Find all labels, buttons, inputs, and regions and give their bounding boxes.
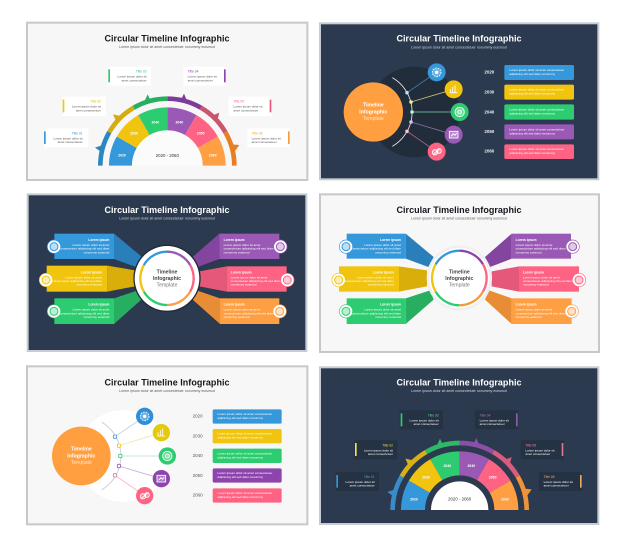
bar: 2030 bbox=[504, 85, 574, 100]
subtitle: Lorem ipsum dolor sit amet consectetuer nonummy euismod bbox=[119, 45, 215, 49]
bar: 2020 bbox=[504, 65, 574, 80]
spoke: pink: Lorem ipsum bbox=[523, 270, 544, 274]
spoke: purple bbox=[193, 234, 287, 267]
callout: title 01 bbox=[44, 128, 88, 147]
outer ring with markers bbox=[95, 94, 239, 166]
years column: 2060 bbox=[193, 493, 203, 498]
subtitle: Lorem ipsum dolor sit amet consectetuer nonummy euismod bbox=[411, 45, 507, 49]
bar: 2060: adipiscing elit sed diam nonummy bbox=[217, 495, 264, 499]
radial diagram bbox=[77, 410, 169, 502]
bar: 2050 bbox=[504, 124, 574, 139]
spoke: purple bbox=[485, 234, 579, 267]
spoke: yellow bbox=[39, 266, 135, 292]
semicircle chart: 2020 - 2060 bbox=[156, 153, 179, 158]
spoke: blue: nonummy euismod bbox=[375, 250, 401, 254]
subtitle: Lorem ipsum dolor sit amet consectetuer nonummy euismod bbox=[411, 217, 507, 221]
spoke: green: Lorem ipsum dolor sit amet bbox=[73, 308, 109, 312]
spoke: pink: nonummy euismod bbox=[231, 283, 257, 287]
bar: 2020: adipiscing elit sed diam nonummy bbox=[217, 416, 264, 420]
bar: 2030: adipiscing elit sed diam nonummy bbox=[509, 92, 556, 96]
central hub bbox=[133, 245, 201, 312]
years column bbox=[193, 414, 203, 498]
subtitle: Lorem ipsum dolor sit amet consectetuer nonummy euismod bbox=[119, 389, 215, 393]
callout: title 02: Lorem ipsum dolor sit bbox=[364, 448, 393, 452]
bar: 2020: adipiscing elit sed diam nonummy bbox=[509, 72, 556, 76]
orange hub: Infographic bbox=[359, 109, 387, 115]
icon: blue bbox=[428, 63, 446, 81]
years column: 2030 bbox=[193, 433, 203, 438]
callout: title 02 bbox=[354, 440, 397, 459]
orange hub: Infographic bbox=[67, 453, 95, 459]
spoke: blue: Lorem ipsum bbox=[88, 238, 109, 242]
spoke: purple: Lorem ipsum bbox=[224, 238, 245, 242]
panel: dark semicircle timeline bbox=[320, 367, 598, 524]
spoke: purple: consectetuer adipiscing elit sed diam bbox=[224, 247, 274, 251]
spoke: purple: Lorem ipsum dolor sit amet bbox=[516, 243, 553, 247]
callout: title 04: amet consectetuer bbox=[480, 422, 505, 426]
central hub: Infographic bbox=[445, 276, 473, 282]
spoke: yellow: Lorem ipsum bbox=[373, 270, 394, 274]
subtitle: Lorem ipsum dolor sit amet consectetuer nonummy euismod bbox=[119, 217, 215, 221]
bar: 2030: adipiscing elit sed diam nonummy bbox=[217, 436, 264, 440]
callout: title 06: Lorem ipsum dolor sit bbox=[544, 480, 573, 484]
outer ring with markers bbox=[387, 438, 532, 510]
callout: title 06: amet consectetuer bbox=[544, 484, 569, 488]
spoke: orange: Lorem ipsum dolor sit amet bbox=[224, 308, 261, 312]
orange hub: Timeline bbox=[71, 447, 92, 453]
callout: title 01: Lorem ipsum dolor sit bbox=[346, 480, 375, 484]
central hub: Timeline bbox=[157, 269, 178, 275]
bar: 2040: Lorem ipsum dolor sit amet consectetuer bbox=[217, 451, 272, 455]
title: Circular Timeline Infographic bbox=[104, 34, 229, 44]
years column: 2020 bbox=[484, 70, 495, 75]
icon: green bbox=[159, 447, 176, 465]
callout: title 02: amet consectetuer bbox=[76, 108, 101, 112]
semicircle chart: 2030 bbox=[422, 475, 430, 479]
callout: title 01: amet consectetuer bbox=[58, 140, 83, 144]
callout: title 06: Title 06 bbox=[544, 475, 555, 479]
orange hub: Timeline bbox=[363, 103, 384, 109]
spoke: blue bbox=[47, 234, 141, 267]
spoke: blue: Lorem ipsum dolor sit amet bbox=[73, 243, 109, 247]
bar: 2060 bbox=[504, 144, 574, 159]
title: Circular Timeline Infographic bbox=[396, 205, 521, 215]
bar: 2020 bbox=[213, 409, 282, 424]
central hub: Template bbox=[449, 283, 470, 289]
spoke: orange: nonummy euismod bbox=[516, 315, 542, 319]
callout: title 06 bbox=[247, 128, 290, 147]
spoke: yellow: consectetuer adipiscing elit sed diam bbox=[344, 279, 394, 283]
semicircle chart: 2020 bbox=[118, 154, 126, 158]
years column: 2050 bbox=[193, 473, 203, 478]
spoke: pink: Lorem ipsum dolor sit amet bbox=[231, 275, 268, 279]
callout: title 03 bbox=[400, 410, 443, 429]
callout: title 03 bbox=[108, 67, 151, 86]
callout: title 05: amet consectetuer bbox=[233, 108, 258, 112]
callout: title 01 bbox=[336, 472, 379, 491]
callout: title 02: Title 02 bbox=[90, 100, 101, 104]
spoke: yellow: consectetuer adipiscing elit sed diam bbox=[52, 279, 102, 283]
bar: 2040: adipiscing elit sed diam nonummy bbox=[509, 112, 556, 116]
bar: 2040: Lorem ipsum dolor sit amet consectetuer bbox=[509, 108, 564, 112]
spoke: orange bbox=[485, 290, 578, 324]
spoke: blue: nonummy euismod bbox=[84, 250, 110, 254]
icon: purple bbox=[153, 470, 170, 487]
icon: purple bbox=[445, 126, 463, 144]
orange hub bbox=[52, 427, 111, 485]
bar: 2060: Lorem ipsum dolor sit amet consectetuer bbox=[509, 147, 564, 151]
semicircle chart: 2020 bbox=[410, 497, 418, 501]
years column: 2030 bbox=[484, 89, 495, 94]
bar: 2040 bbox=[213, 449, 282, 463]
semicircle chart: 2020 - 2060 bbox=[448, 497, 472, 502]
spoke: orange: consectetuer adipiscing elit sed diam bbox=[516, 311, 566, 315]
panel: light radial timeline bbox=[27, 366, 307, 524]
panel: light hub and spokes bbox=[320, 194, 599, 352]
semicircle chart bbox=[410, 463, 509, 510]
icon: yellow bbox=[153, 424, 170, 441]
spoke: orange: consectetuer adipiscing elit sed diam bbox=[224, 311, 274, 315]
central hub bbox=[427, 245, 492, 311]
orange hub: Template bbox=[71, 460, 92, 466]
callout: title 02: amet consectetuer bbox=[368, 452, 393, 456]
bar: 2060: adipiscing elit sed diam nonummy bbox=[509, 151, 556, 155]
icon: green bbox=[451, 103, 469, 121]
central hub: Infographic bbox=[153, 276, 181, 282]
callout: title 04: Title 04 bbox=[480, 413, 491, 417]
spoke: green bbox=[339, 290, 434, 324]
spoke: green: nonummy euismod bbox=[375, 315, 401, 319]
icon: pink bbox=[428, 143, 446, 161]
spoke: pink bbox=[492, 266, 586, 292]
callout: title 04: Lorem ipsum dolor sit bbox=[480, 418, 509, 422]
spoke: purple: Lorem ipsum dolor sit amet bbox=[224, 243, 261, 247]
spoke: yellow: Lorem ipsum dolor sit amet bbox=[65, 275, 102, 279]
callout: title 04: amet consectetuer bbox=[188, 78, 213, 82]
callout: title 01: amet consectetuer bbox=[350, 484, 375, 488]
years column: 2020 bbox=[193, 414, 203, 419]
semicircle chart: 2040 bbox=[175, 120, 183, 124]
subtitle: Lorem ipsum dolor sit amet consectetuer nonummy euismod bbox=[411, 389, 507, 393]
spoke: purple: Lorem ipsum bbox=[516, 238, 537, 242]
bar: 2060 bbox=[213, 488, 282, 503]
years column: 2050 bbox=[484, 129, 495, 134]
callout: title 05: Lorem ipsum dolor sit bbox=[233, 105, 263, 109]
callout: title 06: Title 06 bbox=[252, 131, 263, 135]
callout: title 04 bbox=[183, 67, 226, 86]
icon: blue bbox=[136, 408, 153, 425]
spoke: orange bbox=[193, 290, 286, 324]
spoke: purple: nonummy euismod bbox=[224, 250, 250, 254]
callout: title 01: Title 01 bbox=[72, 131, 83, 135]
bar: 2030: Lorem ipsum dolor sit amet consectetuer bbox=[217, 432, 272, 436]
callout: title 05: Lorem ipsum dolor sit bbox=[525, 448, 555, 452]
spoke: pink bbox=[199, 266, 294, 292]
callout: title 05: Title 05 bbox=[525, 444, 536, 448]
bar: 2030: Lorem ipsum dolor sit amet consectetuer bbox=[509, 88, 564, 92]
semicircle chart: 2050 bbox=[489, 475, 497, 479]
callout: title 03: Lorem ipsum dolor sit bbox=[118, 75, 147, 79]
bar: 2050: Lorem ipsum dolor sit amet consectetuer bbox=[217, 471, 272, 475]
spoke: pink: nonummy euismod bbox=[523, 283, 549, 287]
spoke: green: Lorem ipsum bbox=[88, 303, 109, 307]
spoke: pink: Lorem ipsum dolor sit amet bbox=[523, 275, 560, 279]
years column bbox=[484, 70, 495, 154]
spoke: green bbox=[47, 290, 141, 324]
spoke: orange: nonummy euismod bbox=[224, 315, 250, 319]
callout: title 03: Lorem ipsum dolor sit bbox=[410, 418, 439, 422]
callout: title 01: Lorem ipsum dolor sit bbox=[54, 136, 83, 140]
panel: dark hub and spokes bbox=[28, 194, 306, 351]
callout: title 04 bbox=[475, 410, 518, 429]
callout: title 03: Title 03 bbox=[428, 413, 439, 417]
spoke: purple: nonummy euismod bbox=[516, 250, 542, 254]
callout: title 06: Lorem ipsum dolor sit bbox=[252, 136, 281, 140]
spoke: purple: consectetuer adipiscing elit sed diam bbox=[516, 247, 566, 251]
callout: title 03: amet consectetuer bbox=[414, 422, 439, 426]
panel: light semicircle timeline bbox=[27, 23, 307, 180]
semicircle chart bbox=[109, 107, 226, 166]
bar: 2040: adipiscing elit sed diam nonummy bbox=[217, 455, 264, 459]
spoke: blue: Lorem ipsum bbox=[380, 238, 401, 242]
icon: yellow bbox=[445, 80, 463, 98]
icon: pink bbox=[136, 487, 153, 504]
spoke: yellow bbox=[332, 266, 427, 292]
semicircle chart: 2030 bbox=[130, 132, 138, 136]
semicircle chart: 2050 bbox=[197, 132, 205, 136]
spoke: green: Lorem ipsum bbox=[380, 303, 401, 307]
spoke: blue: consectetuer adipiscing elit sed diam bbox=[60, 247, 110, 251]
bar: 2020: Lorem ipsum dolor sit amet consectetuer bbox=[509, 68, 564, 72]
panel: dark radial timeline bbox=[320, 23, 598, 179]
title: Circular Timeline Infographic bbox=[104, 377, 229, 387]
callout: title 06: amet consectetuer bbox=[252, 140, 277, 144]
callout: title 02: Lorem ipsum dolor sit bbox=[72, 105, 101, 109]
central hub: Template bbox=[157, 283, 178, 289]
central hub: Timeline bbox=[449, 269, 470, 275]
title: Circular Timeline Infographic bbox=[396, 34, 521, 44]
spoke: pink: consectetuer adipiscing elit sed diam bbox=[231, 279, 281, 283]
callout: title 04: Title 04 bbox=[188, 70, 199, 74]
semicircle chart: 2040 bbox=[151, 120, 159, 124]
callout: title 03: amet consectetuer bbox=[122, 78, 147, 82]
callout: title 06 bbox=[539, 472, 582, 491]
callout: title 05: amet consectetuer bbox=[525, 452, 550, 456]
radial diagram bbox=[369, 67, 460, 157]
spoke: pink: Lorem ipsum bbox=[231, 270, 252, 274]
callout: title 01: Title 01 bbox=[364, 475, 375, 479]
spoke: blue: Lorem ipsum dolor sit amet bbox=[364, 243, 401, 247]
callout: title 04: Lorem ipsum dolor sit bbox=[188, 75, 217, 79]
bar: 2030 bbox=[213, 429, 282, 443]
semicircle chart: 2040 bbox=[443, 464, 451, 468]
title: Circular Timeline Infographic bbox=[104, 205, 229, 215]
callout: title 05 bbox=[521, 440, 564, 459]
callout: title 02: Title 02 bbox=[382, 444, 393, 448]
spoke: yellow: nonummy euismod bbox=[76, 283, 102, 287]
bar: 2050: adipiscing elit sed diam nonummy bbox=[217, 475, 264, 479]
years column: 2060 bbox=[484, 149, 495, 154]
spoke: green: nonummy euismod bbox=[84, 315, 110, 319]
bar: 2060: Lorem ipsum dolor sit amet consectetuer bbox=[217, 491, 272, 495]
semicircle chart: 2060 bbox=[501, 497, 509, 501]
spoke: yellow: Lorem ipsum bbox=[81, 270, 102, 274]
spoke: blue bbox=[339, 234, 434, 267]
callout: title 05: Title 05 bbox=[233, 100, 244, 104]
semicircle chart: 2040 bbox=[467, 464, 475, 468]
years column: 2040 bbox=[484, 109, 495, 114]
orange hub bbox=[344, 82, 403, 142]
spoke: pink: consectetuer adipiscing elit sed diam bbox=[523, 279, 573, 283]
spoke: orange: Lorem ipsum bbox=[516, 303, 537, 307]
orange hub: Template bbox=[363, 116, 384, 122]
spoke: yellow: Lorem ipsum dolor sit amet bbox=[357, 275, 394, 279]
spoke: blue: consectetuer adipiscing elit sed diam bbox=[351, 247, 401, 251]
bar: 2020: Lorem ipsum dolor sit amet consectetuer bbox=[217, 412, 272, 416]
spoke: green: consectetuer adipiscing elit sed diam bbox=[60, 311, 110, 315]
bar: 2050 bbox=[213, 468, 282, 483]
spoke: green: consectetuer adipiscing elit sed diam bbox=[351, 311, 401, 315]
callout: title 03: Title 03 bbox=[136, 70, 147, 74]
spoke: orange: Lorem ipsum bbox=[224, 303, 245, 307]
bar: 2050: Lorem ipsum dolor sit amet consectetuer bbox=[509, 127, 564, 131]
semicircle chart: 2060 bbox=[209, 154, 217, 158]
years column: 2040 bbox=[193, 453, 203, 458]
spoke: yellow: nonummy euismod bbox=[368, 283, 394, 287]
spoke: orange: Lorem ipsum dolor sit amet bbox=[516, 308, 553, 312]
spoke: green: Lorem ipsum dolor sit amet bbox=[364, 308, 401, 312]
bar: 2050: adipiscing elit sed diam nonummy bbox=[509, 131, 556, 135]
bar: 2040 bbox=[504, 104, 574, 120]
callout: title 02 bbox=[63, 97, 106, 116]
title: Circular Timeline Infographic bbox=[396, 378, 521, 388]
callout: title 05 bbox=[229, 97, 272, 116]
